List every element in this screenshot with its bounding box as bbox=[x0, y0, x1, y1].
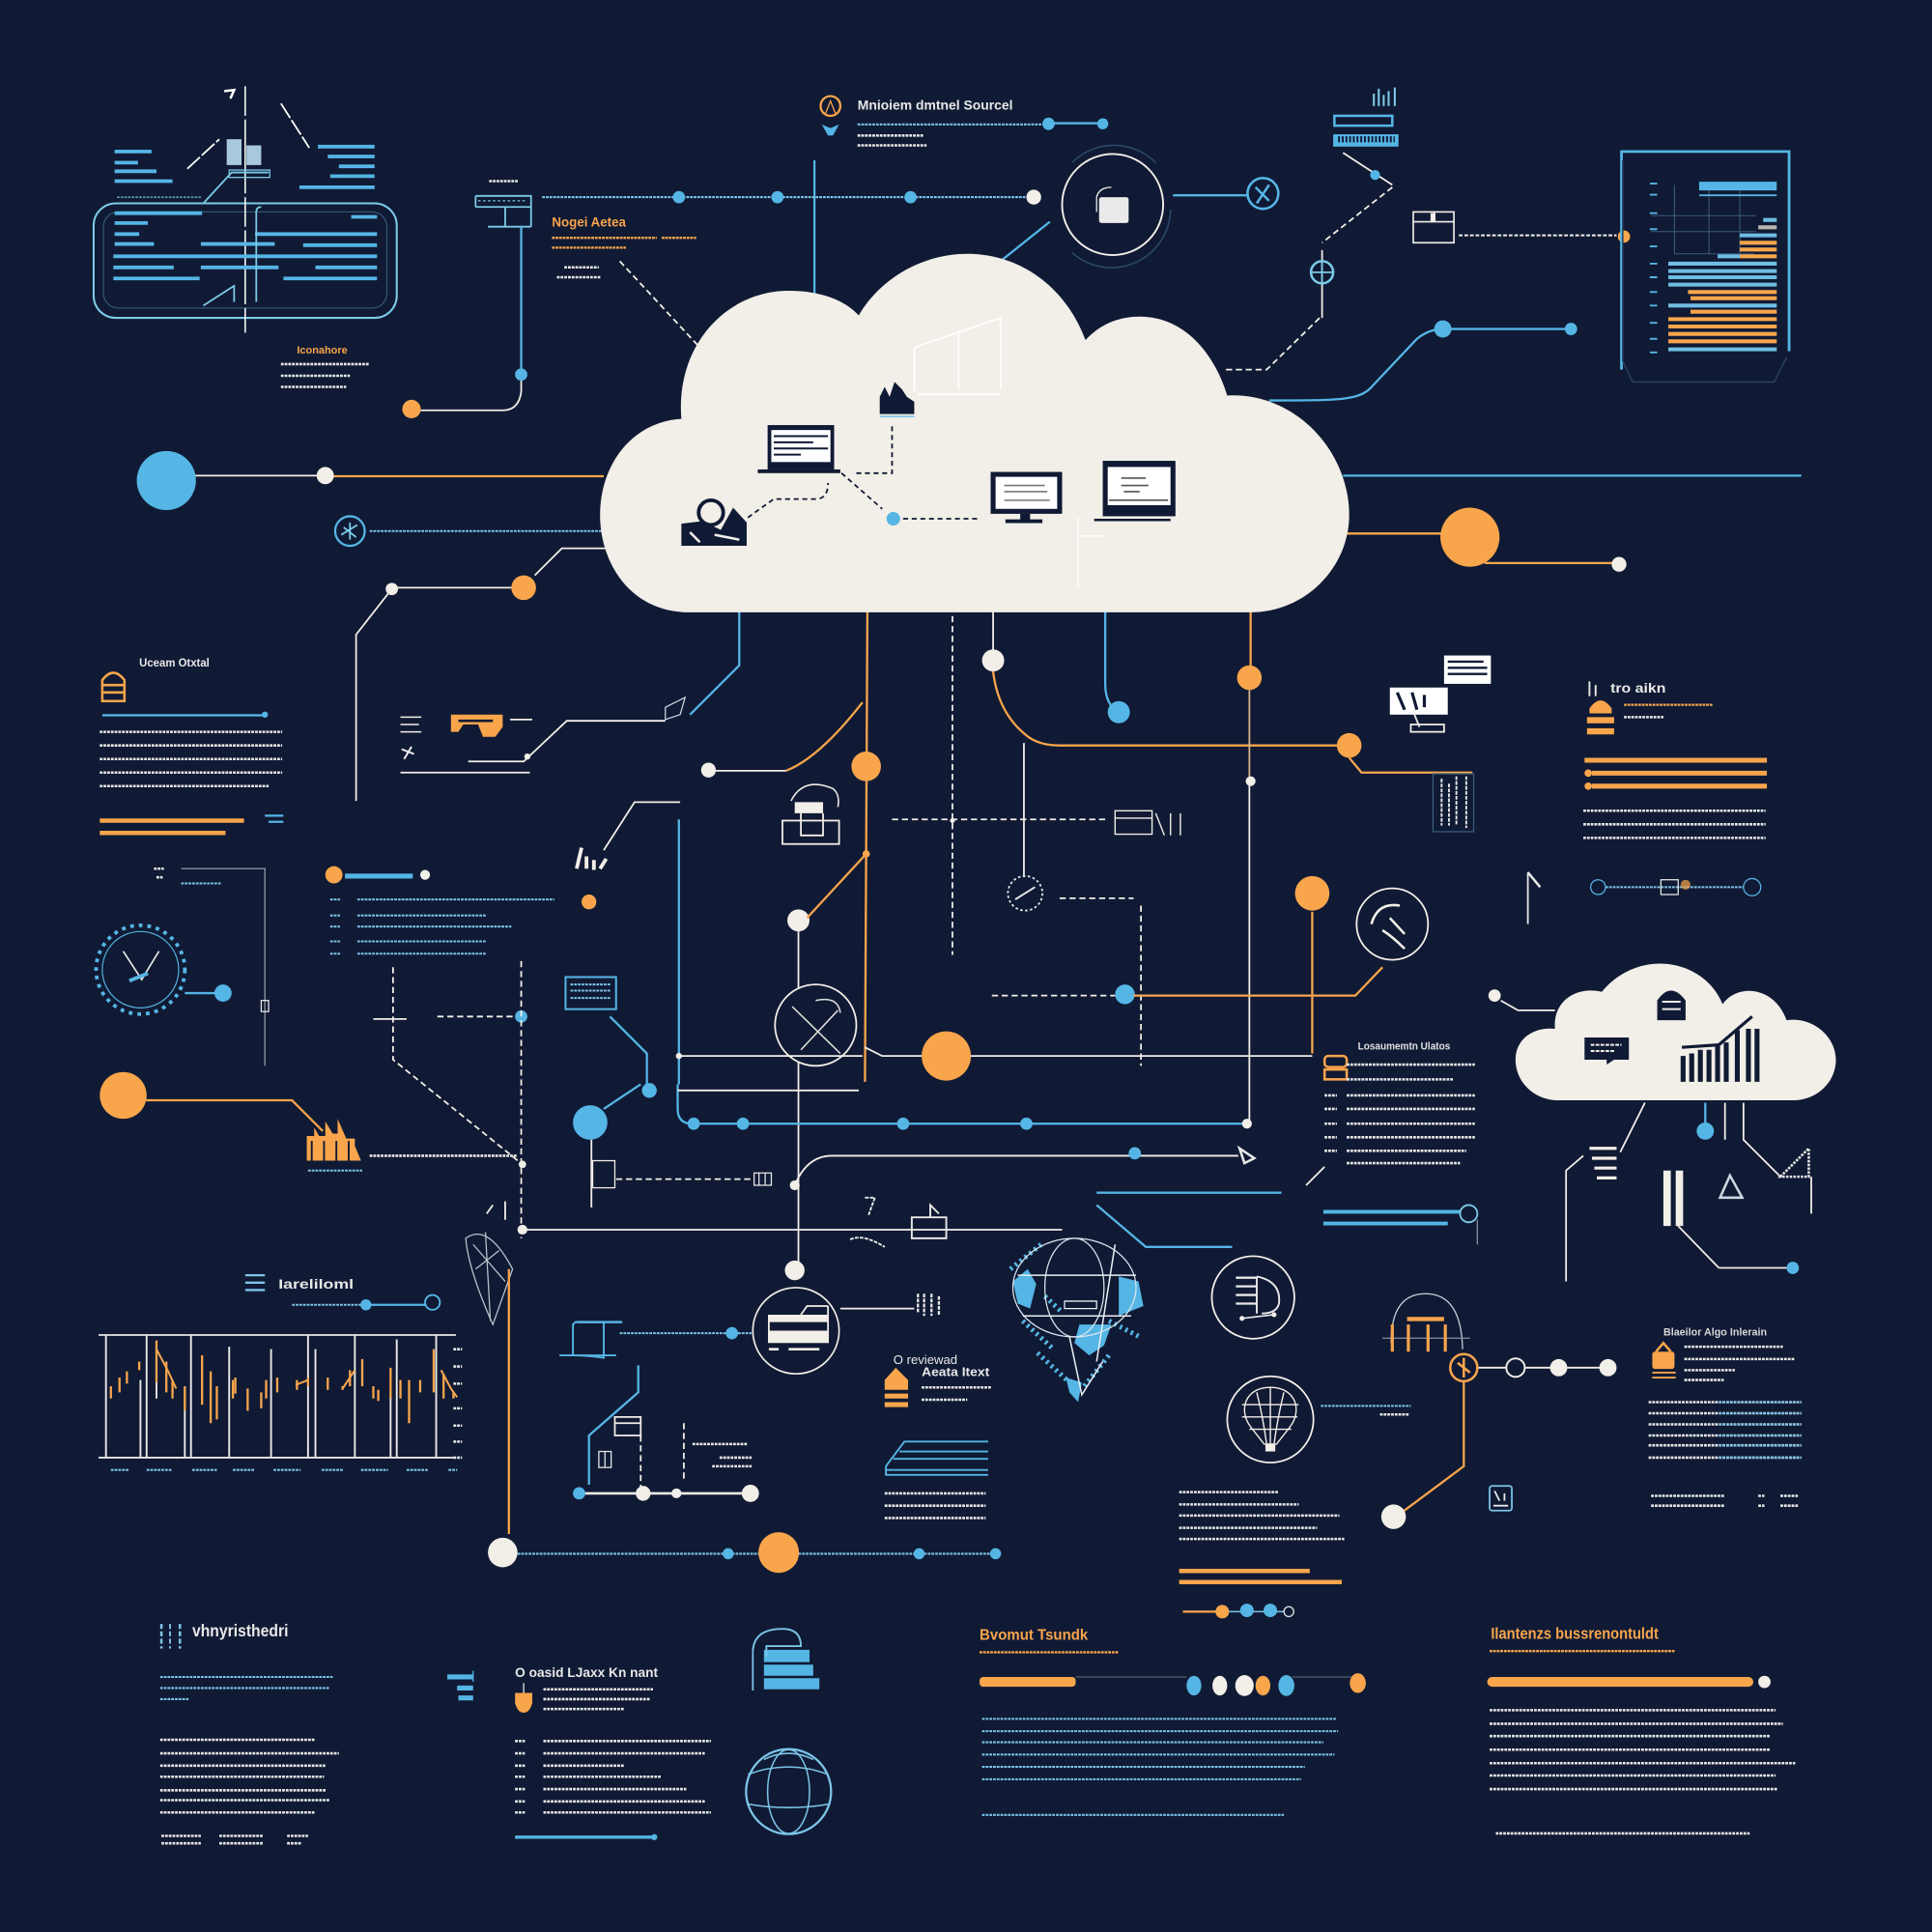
icon: server left with vertical connector bbox=[402, 182, 531, 418]
icon: ring top right of centre bbox=[1356, 889, 1428, 960]
node: blue link with monitor bbox=[565, 977, 657, 1208]
icon: orange house bbox=[102, 672, 125, 701]
panel: bottom-center list bbox=[515, 1664, 711, 1840]
route: central dashed grid bbox=[865, 743, 1382, 1081]
diagram: small circuit with white rail bbox=[573, 1365, 759, 1502]
node: orange and white left bbox=[385, 576, 536, 600]
icon: document with chart lines bbox=[1433, 774, 1474, 832]
panel: bottom-left text bbox=[160, 1621, 339, 1843]
panel: bottom-right progress block bbox=[1488, 1624, 1795, 1833]
text block: review with orange house: Aeata Itext bbox=[922, 1365, 990, 1379]
main cloud bbox=[600, 254, 1350, 612]
icon: orange ring bbox=[820, 96, 840, 116]
text block with orange bars bbox=[1179, 1492, 1345, 1618]
icon: clock gauge bbox=[96, 868, 269, 1065]
top center heading block: Mnioiem dmtnel Sourcel bbox=[858, 98, 1012, 113]
icon: server ring with blue link bbox=[559, 1288, 939, 1374]
chart header: Iareliloml bbox=[278, 1276, 354, 1292]
list: blue lines mid-left bbox=[326, 867, 596, 953]
text block: review with orange house: O reviewad bbox=[894, 1352, 957, 1367]
icon: orange acorn bbox=[515, 1683, 532, 1713]
panel: right text block bbox=[1583, 680, 1767, 838]
caption: icon note: Iconahore bbox=[297, 345, 348, 356]
chart: bottom-left candlestick bbox=[99, 1334, 462, 1470]
panel: top-right horizontal bar chart bbox=[1622, 152, 1789, 382]
route: long blue line bbox=[676, 819, 1252, 1130]
icon: bars with line bbox=[577, 802, 680, 870]
icon: small globe bbox=[1311, 261, 1333, 283]
connector: blue lines bottom right of centre bbox=[1096, 1193, 1282, 1247]
icon: small blue bars bbox=[447, 1671, 473, 1698]
icon: ring with document bbox=[1062, 145, 1278, 268]
icon: small blue badge left bbox=[335, 516, 365, 546]
blue bars with small icon bbox=[1323, 1205, 1477, 1244]
panel: right text block lower: Blaeilor Algo Inlerain bbox=[1663, 1327, 1767, 1339]
panel: left text block: Uceam Otxtal bbox=[139, 656, 210, 669]
panel: bottom-center list: O oasid LJaxx Kn nant bbox=[515, 1664, 658, 1680]
icon: person at desk bbox=[681, 500, 747, 546]
icon: globe splatter bbox=[1010, 1238, 1144, 1403]
icon: monitor bbox=[991, 472, 1062, 522]
branch: orange and white links under cloud bbox=[701, 649, 1472, 1123]
caption: icon note bbox=[281, 345, 370, 387]
panel: bottom-right progress block: Ilantenzs bussrenontuldt bbox=[1491, 1624, 1659, 1642]
icon: centre device bbox=[782, 784, 839, 844]
icon: wire globe blue bbox=[746, 1749, 831, 1834]
text block: orange note: Nogei Aetea bbox=[552, 214, 626, 230]
text block: orange note bbox=[552, 214, 696, 277]
top center heading block bbox=[820, 96, 1108, 146]
small cloud bbox=[1516, 963, 1836, 1100]
icon: window outline bbox=[914, 318, 1001, 394]
icon: tower bbox=[224, 90, 270, 178]
connectors around small cloud bbox=[1489, 989, 1811, 1282]
main blue horizontal line with nodes bbox=[542, 189, 1041, 205]
icon: small blue badge bbox=[1490, 1486, 1512, 1511]
panel: right-center text list: Losaumemtn Ulatos bbox=[1358, 1041, 1450, 1053]
icon: stacked blue database bbox=[753, 1629, 819, 1690]
icon: balloon ring bbox=[1227, 1377, 1410, 1463]
icon: orange archive bbox=[1324, 1056, 1347, 1079]
panel: right-center text list bbox=[1306, 1041, 1475, 1185]
cluster: icons and route under cloud left bbox=[401, 697, 685, 773]
panel: bottom-middle progress block: Bvomut Tsundk bbox=[980, 1628, 1089, 1644]
timeline: right node chain bbox=[1381, 1354, 1616, 1529]
icon: building bbox=[880, 382, 914, 416]
node: top-right blue dots bbox=[1435, 321, 1577, 337]
icon: top-right server and dashed route bbox=[1311, 88, 1399, 318]
icon: central ring and vertical link bbox=[775, 850, 870, 1280]
icon: ring with D bbox=[1211, 1256, 1294, 1339]
route: bottom orange and blue line bbox=[488, 1269, 1001, 1573]
node: large orange right bbox=[1440, 508, 1627, 572]
icon row: top right small timeline bbox=[1528, 872, 1761, 924]
icon: laptop right bbox=[1094, 461, 1176, 520]
icon: laptop left bbox=[757, 425, 840, 473]
icon: stacked server with caption bbox=[885, 1441, 988, 1518]
panel: right text block: tro aikn bbox=[1610, 680, 1665, 696]
icon: arch bbox=[1658, 991, 1686, 1020]
panel: left text block bbox=[99, 656, 283, 833]
panel: right text block lower bbox=[1649, 1327, 1802, 1506]
chart header bbox=[245, 1275, 440, 1311]
icon: blue chevron bbox=[822, 125, 839, 135]
icon: orange house bbox=[885, 1368, 908, 1407]
icon: documents top right of centre bbox=[1390, 656, 1491, 732]
node: large blue circle left bbox=[137, 451, 334, 510]
node: orange with bar icon bbox=[99, 1072, 518, 1171]
icon: wire net bbox=[466, 1233, 513, 1324]
icon: box with dashed link bbox=[1413, 212, 1631, 242]
icon: orange arch gauge bbox=[1382, 1293, 1470, 1351]
icon: chat box bbox=[1584, 1037, 1629, 1065]
network: dashed left junction bbox=[373, 961, 527, 1238]
panel: bottom-middle progress block bbox=[980, 1628, 1366, 1815]
panel: bottom-left text: vhnyristhedri bbox=[192, 1621, 288, 1640]
icon: orange box bbox=[1652, 1343, 1676, 1378]
line: long white horizontal bbox=[523, 1148, 1254, 1247]
panel: top-left data block bbox=[94, 86, 397, 332]
text block: review with orange house bbox=[885, 1352, 992, 1407]
icon: orange house bbox=[1587, 700, 1614, 734]
connector lines behind the main cloud bbox=[195, 160, 1802, 1082]
network dashes in cloud bbox=[748, 425, 1105, 587]
icon: bar chart with arrow bbox=[1682, 1016, 1757, 1082]
